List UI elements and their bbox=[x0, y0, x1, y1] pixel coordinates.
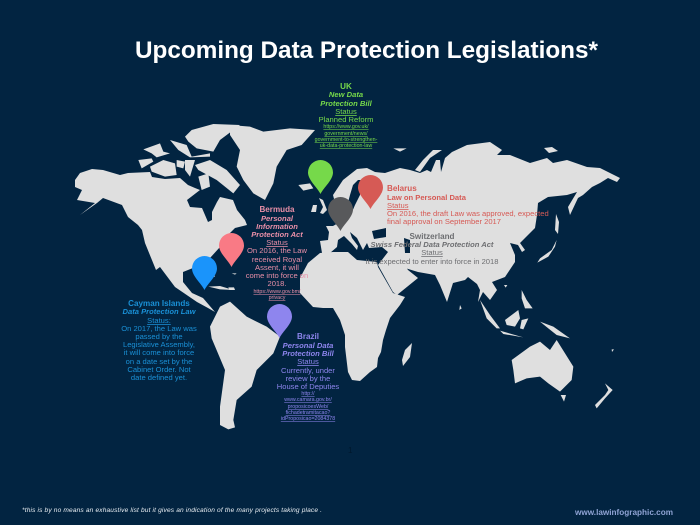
Africa bbox=[300, 252, 405, 381]
text: UK: Planned Reform bbox=[319, 115, 373, 124]
text: Brazil: review by the bbox=[286, 374, 330, 383]
world map bbox=[75, 124, 620, 429]
text: Brazil bbox=[277, 332, 339, 422]
text: UK: New Data bbox=[329, 90, 363, 99]
text: Bermuda: Personal bbox=[261, 214, 294, 223]
pin: Cayman Islands bbox=[192, 256, 217, 290]
text: Switzerland bbox=[366, 232, 498, 266]
text: Bermuda: received Royal bbox=[252, 255, 302, 264]
pin: UK bbox=[308, 160, 333, 194]
text: Cayman Islands: Cabinet Order. Not bbox=[127, 365, 192, 374]
text: UK: https://www.gov.uk/ bbox=[323, 124, 369, 130]
text: Brazil: idProposicao=2084378 bbox=[281, 416, 335, 422]
text: Bermuda: https://www.gov.bm/ bbox=[253, 289, 301, 295]
text: Brazil: House of Deputies bbox=[277, 382, 339, 391]
text: Brazil: Currently, under bbox=[281, 366, 335, 375]
website: www.lawinfographic.com bbox=[574, 508, 673, 517]
text: Belarus: Law on Personal Data bbox=[387, 193, 467, 202]
text: Bermuda: Status bbox=[266, 238, 288, 247]
text: Bermuda: Information bbox=[256, 222, 298, 231]
text: Cayman Islands: on a date set by the bbox=[126, 357, 192, 366]
text: Cayman Islands: it will come into force bbox=[124, 348, 194, 357]
text: Cayman Islands: passed by the bbox=[135, 332, 183, 341]
inland seas bbox=[346, 180, 410, 253]
text: UK: Protection Bill bbox=[320, 99, 373, 108]
text: UK bbox=[315, 82, 378, 149]
text: Belarus bbox=[387, 184, 549, 226]
text: Cayman Islands: On 2017, the Law was bbox=[121, 324, 197, 333]
text: Cayman Islands: Data Protection Law bbox=[122, 307, 197, 316]
text: Cayman Islands bbox=[121, 299, 197, 382]
pin: Switzerland bbox=[328, 197, 353, 231]
text: Brazil: www.camara.gov.br/ bbox=[284, 397, 332, 403]
pin: Bermuda bbox=[219, 233, 244, 267]
Eurasia bbox=[320, 142, 620, 302]
text: Cayman Islands: date defined yet. bbox=[131, 373, 187, 382]
text: Brazil: Personal Data bbox=[283, 341, 333, 350]
text: Brazil: proposicoesWeb/ bbox=[288, 404, 329, 410]
text: Switzerland: Switzerland bbox=[410, 232, 455, 241]
text: Brazil: fichadetramitacao? bbox=[286, 410, 330, 416]
text: UK: uk-data-protection-law bbox=[320, 143, 372, 149]
text: Brazil: Protection Bill bbox=[282, 349, 335, 358]
page number: 1 bbox=[348, 446, 353, 455]
text: Bermuda: come into force on bbox=[246, 271, 308, 280]
text: Bermuda: 2018. bbox=[267, 279, 287, 288]
text: Brazil: Brazil bbox=[297, 332, 319, 341]
text: Bermuda: Bermuda bbox=[259, 205, 295, 214]
North America mainland bbox=[75, 169, 247, 312]
footnote: *this is by no means an exhaustive list but it gives an indication of the many projects taking place . bbox=[22, 507, 322, 514]
text: Brazil: Status bbox=[297, 357, 319, 366]
pin: Brazil bbox=[267, 304, 292, 338]
text: UK: Status bbox=[335, 107, 357, 116]
text: UK: UK bbox=[340, 82, 352, 91]
text: Belarus: Belarus bbox=[387, 184, 417, 193]
text: Bermuda: On 2016, the Law bbox=[247, 246, 307, 255]
text: Bermuda: Protection Act bbox=[251, 230, 303, 239]
text: Bermuda: privacy bbox=[269, 295, 286, 301]
text: Switzerland: It is expected to enter into force in 2018 bbox=[366, 257, 498, 266]
text: Belarus: Status bbox=[387, 201, 409, 210]
text: Switzerland: Swiss Federal Data Protection Act bbox=[371, 240, 494, 249]
pin: Belarus bbox=[358, 175, 383, 209]
text: Cayman Islands: Status: bbox=[147, 316, 171, 325]
text: Belarus: On 2016, the draft Law was approved, expected bbox=[387, 209, 549, 218]
text: Belarus: final approval on September 2017 bbox=[387, 217, 501, 226]
text: Cayman Islands: Legislative Assembly, bbox=[123, 340, 195, 349]
text: UK: government/news/ bbox=[324, 131, 368, 137]
title: Upcoming Data Protection Legislations* bbox=[135, 37, 599, 64]
text: UK: government-to-strengthen- bbox=[315, 137, 378, 143]
text: Switzerland: Status bbox=[421, 248, 443, 257]
text: Cayman Islands: Cayman Islands bbox=[128, 299, 190, 308]
text: Brazil: http:// bbox=[301, 391, 315, 397]
text: Bermuda: Assent, it will bbox=[255, 263, 299, 272]
text: Bermuda bbox=[246, 205, 308, 301]
